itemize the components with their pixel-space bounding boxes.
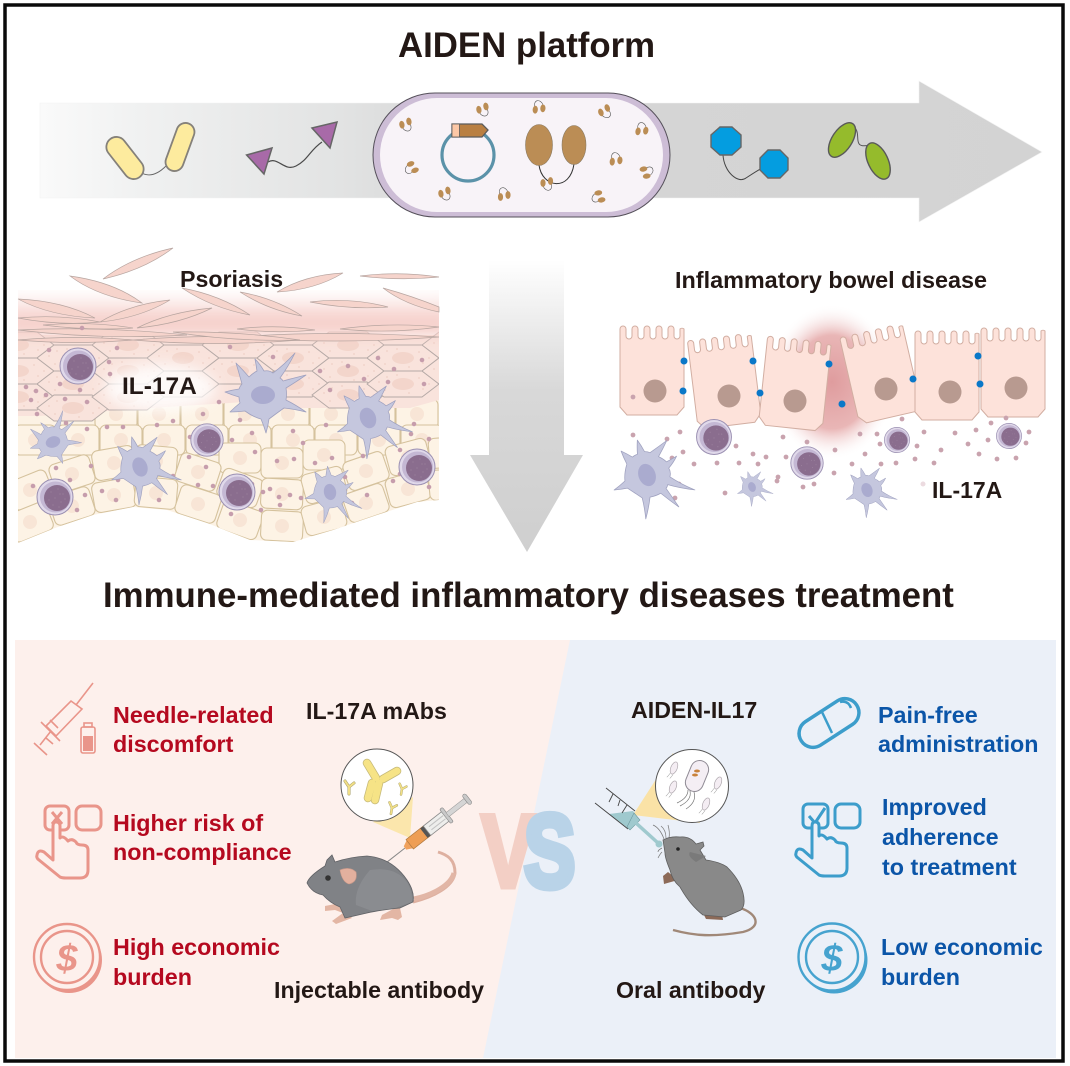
body (663, 837, 744, 917)
text: higher risk of non-compliance (113, 810, 292, 865)
label: IL-17A skin: IL-17A (122, 373, 197, 400)
title: AIDEN platform: AIDEN platform (398, 26, 655, 65)
nuclei (644, 376, 1028, 412)
ear and eye (340, 868, 356, 884)
icon: purple triangle molecule (247, 122, 337, 174)
engineered bacterium capsule (373, 93, 670, 217)
panel: psoriasis skin illustration (18, 248, 440, 543)
small secreted molecules (398, 100, 654, 204)
text: pain-free administration: Pain-free (878, 702, 978, 728)
text: pain-free administration: administration (878, 731, 1039, 757)
body (307, 855, 413, 918)
panel: gut epithelium illustration (601, 304, 1045, 526)
text: low economic burden: burden (881, 964, 960, 990)
white glow behind IL-17A (104, 364, 216, 412)
VS mark: V (481, 793, 535, 909)
VS mark (481, 793, 575, 910)
label: IL-17A mAbs: IL-17A mAbs (306, 698, 447, 724)
label: AIDEN-IL17: AIDEN-IL17 (631, 697, 757, 723)
lymphocytes (697, 420, 1022, 479)
label: injectable antibody: Injectable antibody (274, 977, 484, 1003)
icon: dollar coin red: $ (55, 938, 78, 980)
feet (663, 872, 723, 920)
text: improved adherence to treatment: adherence (882, 824, 999, 850)
label: Inflammatory bowel disease: Inflammatory bowel disease (675, 267, 987, 293)
label: oral antibody: Oral antibody (616, 977, 766, 1003)
inflammatory glow (768, 304, 896, 460)
icon: dollar coin red (34, 924, 102, 993)
text: needle-related discomfort (113, 702, 274, 757)
feet (325, 903, 402, 924)
tight junction dots (680, 352, 984, 408)
illustration: oral gavage mouse (595, 750, 756, 935)
text: low economic burden (881, 934, 1043, 990)
icon: blue octagon molecule (711, 127, 788, 180)
platform arrow (40, 81, 1042, 222)
callout: cone (633, 753, 700, 823)
text: high economic burden: High economic (113, 934, 280, 960)
text: needle-related discomfort: discomfort (113, 731, 234, 757)
skin keratinocyte layer (18, 400, 439, 543)
lymphocytes (37, 348, 435, 515)
dendritic cells (601, 427, 900, 526)
icon: dollar coin blue: $ (820, 938, 843, 980)
tail (413, 852, 455, 902)
text: improved adherence to treatment: to treatment (882, 854, 1017, 880)
text: high economic burden (113, 934, 280, 990)
text: low economic burden: Low economic (881, 934, 1043, 960)
panel: comparison background (15, 640, 1056, 1058)
text: improved adherence to treatment: Improved (882, 794, 987, 820)
IL-17A cytokine dots (633, 397, 1029, 498)
label: IL-17A gut: IL-17A (932, 477, 1002, 503)
syringe (381, 791, 474, 870)
text: higher risk of non-compliance: Higher risk of (113, 810, 263, 836)
callout: antibody circle (341, 749, 413, 821)
dendritic cells (22, 353, 416, 525)
VS mark: S (524, 794, 575, 910)
icon: yellow bispecific molecule (102, 120, 197, 183)
callout: cone (373, 797, 413, 838)
whiskers (653, 825, 669, 858)
hexagonal spinous layer (18, 332, 439, 422)
text: high economic burden: burden (113, 964, 192, 990)
text: needle-related discomfort: Needle-related (113, 702, 274, 728)
text: pain-free administration (878, 702, 1039, 757)
callout: bacteria circle (656, 750, 728, 822)
illustration: injected mouse (307, 749, 474, 924)
tail (673, 908, 756, 935)
downward arrow (470, 260, 583, 552)
scales of the stratum corneum (18, 248, 439, 344)
epithelial cells (620, 323, 1045, 431)
icon: capsule (794, 693, 864, 753)
icon: green oval molecule (823, 118, 895, 183)
heading: treatment: Immune-mediated inflammatory diseases treatment (103, 576, 954, 615)
brown antibody pair (526, 124, 586, 184)
icon: dollar coin blue (798, 924, 868, 994)
plasmid ring with insert (442, 124, 494, 181)
text: higher risk of non-compliance: non-compliance (113, 839, 292, 865)
icon: syringe and battery (34, 683, 95, 755)
pink inflamed haze (6, 292, 451, 336)
icon: checked box and hand (796, 804, 860, 876)
icon: unchecked box and hand (37, 806, 101, 878)
feeding syringe (595, 788, 662, 848)
text: improved adherence to treatment (882, 794, 1017, 880)
label: Psoriasis: Psoriasis (180, 266, 283, 292)
IL-17A cytokine dots (26, 328, 429, 514)
